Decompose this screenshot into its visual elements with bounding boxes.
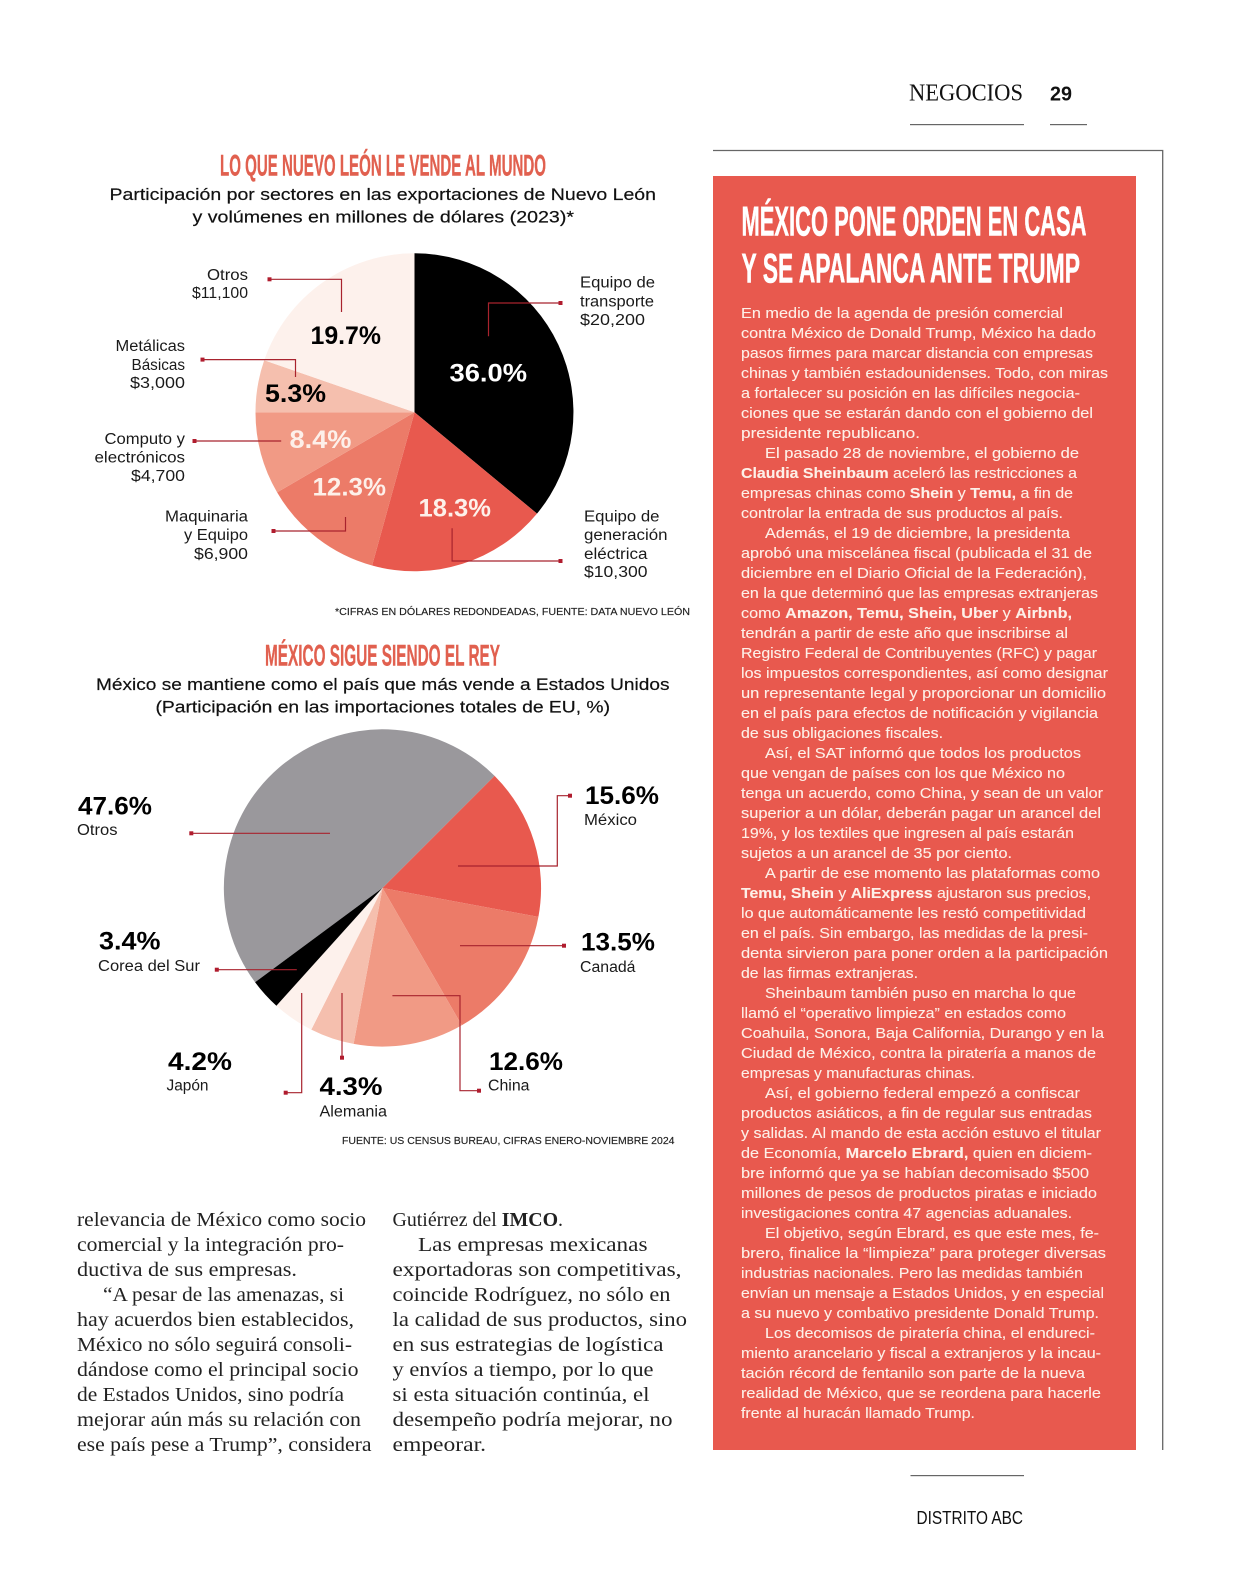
sector labels: eléctrica — [584, 546, 648, 563]
panel body text: Además, el 19 de diciembre, la presidenta — [765, 525, 1071, 542]
article text: column 2: la calidad de sus productos, sino — [392, 1309, 687, 1331]
page header — [909, 80, 1087, 125]
slice: Japón — [276, 888, 382, 1030]
sector labels: transporte — [580, 294, 654, 310]
percentage values: 4.3% — [320, 1073, 382, 1101]
panel body text: frente al huracán llamado Trump. — [741, 1405, 975, 1422]
sector labels: Computo y — [104, 431, 185, 448]
article text: column 2: si esta situación continúa, el — [392, 1384, 650, 1406]
panel body text: Los decomisos de piratería china, el endureci- — [765, 1325, 1095, 1342]
panel body text: El objetivo, según Ebrard, es que este mes, fe- — [765, 1225, 1099, 1242]
slice: computo y electrónicos — [255, 412, 414, 492]
sector labels: $20,200 — [580, 312, 645, 329]
panel body text: presidente republicano. — [741, 425, 920, 442]
country labels: China — [488, 1078, 530, 1094]
panel body text: bre informó que ya se habían decomisado $500 — [741, 1165, 1089, 1182]
article text: column 1: relevancia de México como socio — [77, 1209, 366, 1231]
panel body text — [741, 305, 1108, 1422]
country labels: Japón — [166, 1078, 208, 1094]
leader lines — [192, 277, 562, 563]
percentage values: 47.6% — [78, 792, 152, 820]
article text: column 1: comercial y la integración pro- — [77, 1234, 344, 1256]
panel body text: de las firmas extranjeras. — [741, 965, 918, 982]
chart subtitle: importaciones de EU — [96, 675, 670, 716]
percentage values — [78, 782, 659, 1101]
panel body text: Sheinbaum también puso en marcha lo que — [765, 985, 1076, 1002]
panel body text: que vengan de países con los que México no — [741, 765, 1065, 782]
panel body text: llamó el “operativo limpieza” en estados como — [741, 1005, 1066, 1022]
panel body text: contra México de Donald Trump, México ha dado — [741, 325, 1096, 342]
panel body text: realidad de México, que se reordena para hacerle — [741, 1385, 1101, 1402]
panel body text: en la que determinó que las empresas extranjeras — [741, 585, 1098, 602]
panel body text: diciembre en el Diario Oficial de la Federación), — [741, 565, 1087, 582]
panel body text: denta sirvieron para poner orden a la participación — [741, 945, 1108, 962]
article text: column 2: exportadoras son competitivas, — [392, 1259, 682, 1281]
sector labels: Equipo de — [584, 508, 660, 526]
country labels: Otros — [77, 822, 118, 839]
panel body text: investigaciones contra 47 agencias aduanales. — [741, 1205, 1072, 1222]
article text: column 1: de Estados Unidos, sino podría — [77, 1384, 344, 1406]
slice: China — [354, 888, 462, 1047]
panel body text: Coahuila, Sonora, Baja California, Durango y en la — [741, 1025, 1105, 1042]
percentage values: 5.3% — [265, 380, 326, 408]
sector labels: $3,000 — [130, 375, 185, 392]
panel body text: lo que automáticamente les restó competitividad — [741, 905, 1086, 922]
sector labels: Maquinaria — [165, 508, 248, 526]
chart subtitle: exportaciones — [110, 185, 656, 226]
article text: column 1: hay acuerdos bien establecidos, — [77, 1309, 354, 1331]
page footer — [910, 1475, 1024, 1528]
pie slices and leader lines — [189, 729, 572, 1095]
chart subtitle: importaciones de EU: México se mantiene como el país que más vende a Estados Unidos — [96, 675, 670, 694]
article text: column 2: Las empresas mexicanas — [418, 1234, 648, 1256]
panel body text: productos asiáticos, a fin de regular sus entradas — [741, 1105, 1092, 1122]
panel body text: aprobó una miscelánea fiscal (publicada el 31 de — [741, 545, 1092, 562]
article text: column 2: desempeño podría mejorar, no — [392, 1409, 672, 1431]
article text: column 2: coincide Rodríguez, no sólo en — [392, 1284, 670, 1306]
panel body text: de Economía, Marcelo Ebrard, quien en diciem- — [741, 1145, 1092, 1162]
sector labels: Metálicas — [116, 338, 185, 355]
percentage values — [265, 322, 527, 522]
panel body text: sujetos a un arancel de 35 por ciento. — [741, 845, 1012, 862]
pie chart: exportaciones de Nuevo León — [94, 253, 668, 581]
slice: Alemania — [311, 888, 382, 1044]
percentage values: 4.2% — [168, 1048, 232, 1076]
sector labels: Equipo de — [580, 274, 655, 292]
article text: column 1: mejorar aún más su relación con — [77, 1409, 361, 1431]
sector labels: $11,100 — [192, 285, 248, 302]
sector labels: $6,900 — [194, 546, 248, 563]
percentage values: 13.5% — [581, 928, 655, 956]
article text: column 2: empeorar. — [392, 1434, 486, 1456]
slice: equipo de transporte — [414, 253, 573, 514]
article text: column 1 — [77, 1209, 372, 1456]
panel body text: superior a un dólar, deberán pagar un arancel del — [741, 805, 1101, 822]
panel body text: Registro Federal de Contribuyentes (RFC) y pagar — [741, 645, 1097, 662]
panel body text: a fortalecer su posición en las difíciles negocia- — [741, 385, 1080, 402]
panel body text: El pasado 28 de noviembre, el gobierno de — [765, 445, 1079, 462]
leader lines — [189, 794, 572, 1095]
panel body text: tenga un acuerdo, como China, y sean de un valor — [741, 785, 1103, 802]
panel body text: miento arancelario y fiscal a extranjeros y la incau- — [741, 1345, 1101, 1362]
panel body text: En medio de la agenda de presión comercial — [741, 305, 1063, 322]
percentage values: 3.4% — [99, 928, 160, 956]
percentage values: 36.0% — [450, 360, 527, 388]
article text: column 2 — [392, 1209, 687, 1456]
panel body text: chinas y también estadounidenses. Todo, con miras — [741, 365, 1108, 382]
article text: column 2: y envíos a tiempo, por lo que — [392, 1359, 654, 1381]
slice: otros — [264, 253, 414, 412]
panel body text: tación récord de fentanilo son parte de la nueva — [741, 1365, 1086, 1382]
source note: Nuevo León: *CIFRAS EN DÓLARES REDONDEADAS, FUENTE: DATA NUEVO LEÓN — [335, 605, 690, 618]
slice: metálicas básicas — [255, 360, 414, 412]
article text: column 1: ese país pese a Trump”, considera — [77, 1434, 372, 1456]
article text: column 2: en sus estrategias de logística — [392, 1334, 664, 1356]
percentage values: 12.3% — [312, 474, 386, 502]
percentage values: 15.6% — [585, 782, 659, 810]
country labels: Alemania — [320, 1104, 387, 1120]
percentage values: 18.3% — [418, 494, 491, 522]
article text: column 1: “A pesar de las amenazas, si — [103, 1284, 344, 1306]
panel body text: empresas y manufacturas chinas. — [741, 1065, 975, 1082]
panel body text: Claudia Sheinbaum aceleró las restricciones a — [741, 465, 1078, 482]
panel body text: 19%, y los textiles que ingresen al país estarán — [741, 825, 1074, 842]
panel body text: como Amazon, Temu, Shein, Uber y Airbnb, — [741, 605, 1072, 622]
article text: column 1: ductiva de sus empresas. — [77, 1259, 297, 1281]
panel body text: y salidas. Al mando de esta acción estuvo el titular — [741, 1125, 1101, 1142]
sector labels: Básicas — [132, 357, 185, 374]
sector labels: y Equipo — [184, 527, 248, 544]
chart subtitle: exportaciones: Participación por sectores en las exportaciones de Nuevo León — [110, 185, 656, 204]
country labels: México — [584, 812, 637, 829]
panel body text: un representante legal y proporcionar un domicilio — [741, 685, 1106, 702]
panel body text: envían un mensaje a Estados Unidos, y en especial — [741, 1285, 1104, 1302]
pie chart: importaciones de Estados Unidos — [77, 729, 659, 1120]
sector labels — [94, 267, 668, 581]
panel frame lines — [713, 150, 1163, 1450]
page header: 29 — [1050, 84, 1072, 106]
panel body text: a su nuevo y combativo presidente Donald Trump. — [741, 1305, 1099, 1322]
article text: column 1: dándose como el principal socio — [77, 1359, 358, 1381]
page footer: DISTRITO ABC — [916, 1508, 1023, 1528]
page header: NEGOCIOS — [909, 80, 1023, 106]
article text: column 2: Gutiérrez del IMCO. — [392, 1209, 563, 1231]
slice: equipo de generación eléctrica — [372, 412, 537, 571]
article text: column 1: México no sólo seguirá consoli- — [77, 1334, 352, 1356]
panel body text: Temu, Shein y AliExpress ajustaron sus precios, — [741, 885, 1091, 902]
percentage values: 12.6% — [489, 1048, 563, 1076]
chart title: México sigue siendo el rey: MÉXICO SIGUE SIENDO EL REY — [265, 638, 500, 672]
panel body text: brero, finalice la “limpieza” para proteger diversas — [741, 1245, 1106, 1262]
sector labels: generación — [584, 527, 668, 544]
panel body text: de sus obligaciones fiscales. — [741, 725, 943, 742]
panel body text: ciones que se estarán dando con el gobierno del — [741, 405, 1093, 422]
slice: México — [382, 776, 541, 917]
panel body text: millones de pesos de productos piratas e iniciado — [741, 1185, 1097, 1202]
panel body text: Ciudad de México, contra la piratería a manos de — [741, 1045, 1096, 1062]
country labels — [77, 812, 637, 1120]
panel body text: empresas chinas como Shein y Temu, a fin de — [741, 485, 1073, 502]
panel body text: tendrán a partir de este año que inscribirse al — [741, 625, 1068, 642]
panel body text: en el país. Sin embargo, las medidas de la presi- — [741, 925, 1088, 942]
sector labels: $10,300 — [584, 564, 648, 581]
panel body text: en el país para efectos de notificación y vigilancia — [741, 705, 1099, 722]
percentage values: 19.7% — [310, 322, 381, 350]
panel heading — [742, 198, 1086, 292]
source note: US Census Bureau: FUENTE: US CENSUS BUREAU, CIFRAS ENERO-NOVIEMBRE 2024 — [342, 1136, 675, 1147]
panel body text: A partir de ese momento las plataformas como — [765, 865, 1100, 882]
slice: Corea del Sur — [255, 888, 382, 1006]
panel body text: Así, el gobierno federal empezó a confiscar — [765, 1085, 1080, 1102]
panel body text: Así, el SAT informó que todos los productos — [765, 745, 1081, 762]
slice: Canadá — [382, 888, 538, 1025]
panel body text: controlar la entrada de sus productos al país. — [741, 505, 1063, 522]
panel: México pone orden en casa — [713, 176, 1136, 1450]
slice: maquinaria y equipo — [277, 412, 414, 566]
country labels: Corea del Sur — [98, 958, 200, 975]
chart subtitle: exportaciones: y volúmenes en millones de dólares (2023)* — [192, 208, 574, 226]
percentage values: 8.4% — [290, 426, 352, 454]
panel body text: pasos firmes para marcar distancia con empresas — [741, 345, 1093, 362]
sector labels: electrónicos — [94, 450, 185, 466]
panel body text: industrias nacionales. Pero las medidas también — [741, 1265, 1083, 1282]
sector labels: Otros — [207, 267, 248, 284]
pie slices and leader lines — [192, 253, 573, 571]
chart subtitle: importaciones de EU: (Participación en las importaciones totales de EU, %) — [156, 698, 610, 716]
panel body text: los impuestos correspondientes, así como designar — [741, 665, 1108, 682]
sector labels: $4,700 — [131, 468, 185, 485]
country labels: Canadá — [580, 959, 636, 976]
slice: otros — [224, 729, 495, 982]
chart title: Lo que Nuevo León le vende al mundo: LO QUE NUEVO LEÓN LE VENDE AL MUNDO — [220, 148, 546, 182]
